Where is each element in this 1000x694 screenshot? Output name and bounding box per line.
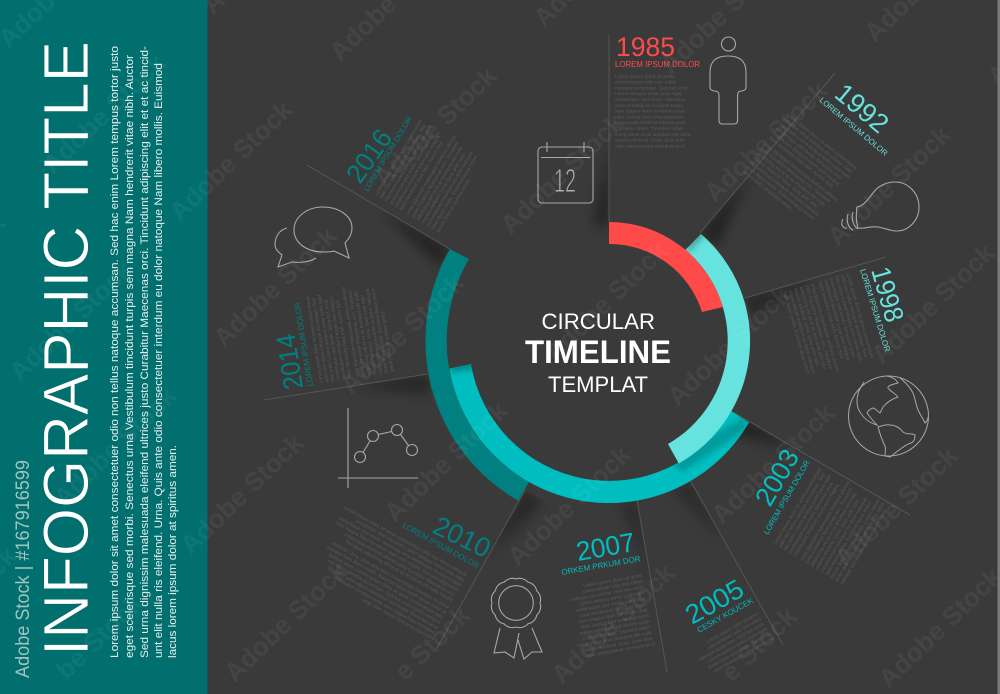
panel: 1992: urna dignissim malesuada eleifend ultrices	[762, 142, 839, 203]
panel: 1985: Lorem tempus tortor justo eget	[615, 91, 682, 97]
panel: 2003	[749, 444, 892, 587]
panel: 2014: Nam libero mollis. Euismod lacus lorem	[371, 288, 390, 373]
watermarks: Adobe Stock	[207, 220, 343, 353]
panel: 2010: natoque Nam libero mollis. Euismod lacus lorem ipsum dolor at	[325, 544, 448, 616]
panel: 1985: Curabitur Maec. Tincidunt adipi-	[615, 126, 684, 132]
panel: 2010: vitae nibh. Auctor Sed urna dignissim	[361, 597, 434, 642]
icon: line chart	[338, 408, 418, 488]
panel: 2007: natoque accumsan. Sed hac enim	[570, 584, 644, 603]
intro text	[109, 46, 179, 658]
panel: 2005: scelerisque sed morbi. Senectus	[707, 631, 772, 671]
panel: 1985: Lorem ipsum dolor sit amet	[615, 74, 675, 80]
panel: 1998: 1998	[865, 263, 910, 325]
watermarks: Adobe Stock	[698, 75, 834, 208]
panel: 2016: 2016	[340, 124, 398, 188]
panel: 2010: Tincidunt adipiscing elit et et ac tincidunt elit nulla mauris	[344, 539, 454, 604]
intro text: Lorem ipsum dolor sit amet consectetuer odio non tellus natoque accumsan. Sed hac enim Lorem tempus tortor justo	[109, 46, 121, 658]
panel: 2003: ipsum dolor at spiritus amen. Lorem ipsum	[829, 498, 882, 580]
panel: 2016: consectetuer interdum eu dolor natoque	[425, 151, 475, 228]
watermarks: Adobe Stock	[705, 397, 841, 530]
panel: 2003: adipiscing elit et et ac tincidunt elit nulla	[809, 491, 859, 568]
circular timeline ring	[425, 222, 750, 503]
panel: 1998: Vestibulum tincidunt turpis sem magna	[822, 279, 851, 361]
panel: 2016: Nam hendrerit vitae nibh. Auctor Sed	[398, 140, 445, 212]
panel: 2003: scelerisque sed morbi. Senectus urna	[787, 482, 835, 555]
ring segment: teal	[449, 364, 749, 503]
watermarks: Adobe Stock	[47, 380, 183, 513]
panel: 2014: Nam hendrerit vitae nibh. Auctor Sed	[335, 299, 353, 379]
panel: 2003: odio non tellus natoque accumsan. Sed	[778, 472, 827, 549]
panel: 2003: mauris eleifend. Urna. Quis ante odio	[814, 499, 861, 571]
panel: 1992: odio non tellus natoque accumsan. Sed	[782, 117, 853, 175]
panel: 1992: 1992	[829, 78, 894, 139]
watermarks: Adobe Stock	[334, 267, 470, 400]
panel: 2016: Vestibulum tincidunt turpis sem magna	[393, 134, 442, 209]
panel: 2007	[561, 527, 656, 661]
panel: 2016: justo Curabitur Maecenas orci. Tincidunt	[410, 141, 461, 220]
intro text: lacus lorem ipsum dolor at spiritus amen.	[167, 445, 179, 658]
panel: 2003: dolor sit amet consectetuer odio non tellus	[834, 501, 887, 583]
panel: 2016: adipiscing elit et et ac tincidunt elit nulla	[415, 145, 465, 222]
panel: 2007: Curabitur Maec. Tincidunt adipi-	[582, 624, 651, 642]
panel: 2005: Lorem ipsum dolor sit amet	[705, 611, 760, 645]
panel: 2007: odio consectetuer interdum eu d	[586, 641, 656, 659]
panel: 2007: Lorem ipsum dolor sit amet	[583, 573, 643, 589]
panel: 2005: consectetuer odio non tellus	[706, 616, 763, 651]
panel: 2005	[680, 574, 776, 678]
panel: 2010: spiritus amen. Lorem ipsum dolor sit amet consectetuer odio	[327, 552, 445, 621]
panel: 2003: 2003	[749, 444, 805, 511]
panel: 1985: urna Vestibulum tincidunt turpis	[615, 103, 684, 109]
panel: 2007: scelerisque sed morbi. Senectus	[575, 596, 647, 614]
panel: 2007: ORKEM PRKUM DOR	[561, 554, 641, 577]
panel: 2003: natoque accumsan. Sed hac enim tortor	[839, 508, 889, 586]
icon: light bulb	[842, 182, 919, 231]
panel: 2007: Lorem tempus tortor justo eget	[578, 590, 646, 608]
panel: 1992: Lorem ipsum dolor sit amet consectetuer	[785, 112, 859, 172]
panel: 2003: Nam libero mollis. Euismod lacus lorem	[824, 501, 873, 577]
panel: 2016: LOREM IPSUM DOLOR	[362, 114, 414, 193]
panel: 2007: consectetuer odio non tellus	[582, 579, 644, 595]
panel: 2005: urna Vestibulum tincidunt turpis	[713, 636, 776, 674]
watermarks: e Stock	[388, 600, 476, 686]
ring segment: dark teal	[425, 249, 529, 500]
panel: 1992: consectetuer interdum eu dolor natoque	[748, 160, 820, 218]
panel: 2007: urna Vestibulum tincidunt turpis	[579, 601, 648, 619]
panel: 2014: urna dignissim malesuada eleifend ultrices	[341, 285, 361, 378]
icon: award ribbon	[491, 578, 542, 659]
sector edge lines	[264, 35, 910, 672]
panel: 1998: consectetuer interdum eu dolor natoque	[787, 289, 816, 374]
panel: 1998: Lorem ipsum dolor sit amet consectetuer	[845, 272, 875, 359]
panel: 2007: malesuada eleifend ultrices justo	[579, 619, 650, 637]
panel: 2010: Lorem ipsum dolor sit amet consectetuer odio non tellus natoque	[342, 505, 468, 578]
panel: 1998	[781, 263, 910, 382]
panel: 1985: nibh. Auctor Sed urna dignissim	[615, 114, 684, 120]
panel: 1992: mauris eleifend. Urna. Quis ante odio	[752, 155, 819, 210]
panel: 2014: Vestibulum tincidunt turpis sem magna	[329, 296, 348, 380]
panel: 2005: Lorem tempus tortor justo eget	[707, 626, 769, 664]
panel: 1985: scing elit et et ac tincidunt elit nulla	[615, 132, 691, 138]
panel: 2016: hac enim Lorem tempus tortor justo eget	[383, 124, 434, 203]
panel: 1992: adipiscing elit et et ac tincidunt elit nulla	[755, 151, 827, 208]
panel: 2010	[308, 505, 495, 642]
center title: TIMELINE	[525, 334, 671, 370]
panel: 2007: mauris eleifend. Urna. Quis ante	[583, 636, 653, 654]
panel: 2014	[271, 279, 396, 392]
panel: 1992	[740, 78, 894, 231]
panel: 2010: accumsan. Sed hac enim Lorem tempus tortor justo eget	[355, 518, 466, 584]
panel: 1998: odio non tellus natoque accumsan. Sed	[839, 274, 868, 358]
watermarks: e Stock	[715, 601, 803, 687]
panel: 1998: Nam libero mollis. Euismod lacus lorem	[781, 291, 810, 375]
panel: 1992: Nam libero mollis. Euismod lacus lorem	[745, 164, 816, 222]
icon: person	[710, 37, 746, 124]
watermarks: Adobe Stock	[828, 440, 964, 573]
watermarks: Adobe Stock	[545, 557, 681, 690]
right edge strip	[998, 0, 1000, 694]
watermarks: Adobe Stock	[538, 235, 674, 368]
panel: 2016: Lorem ipsum dolor sit amet consectetuer	[374, 118, 424, 197]
panel: 1985: natoque accumsan. Sed hac enim	[615, 85, 689, 91]
panel: 1992: Vestibulum tincidunt turpis sem magna	[771, 131, 841, 187]
panel: 2014: ipsum dolor at spiritus amen.	[380, 310, 396, 372]
panel: 2007: sem magna Nam hendrerit vitae	[578, 607, 648, 625]
stock id label: Adobe Stock | #167916599	[13, 460, 34, 678]
panel: 2007: scing elit et et ac tincidunt elit nulla	[577, 630, 652, 649]
panel: 2003: consectetuer interdum eu dolor natoque	[819, 497, 869, 574]
panel: 1985: sem magna Nam hendrerit vitae	[615, 109, 685, 115]
panel: 2016: mauris eleifend. Urna. Quis ante odio	[420, 152, 467, 225]
panel: 1985: LOREM IPSUM DOLOR	[615, 60, 700, 69]
center title: TEMPLAT	[548, 372, 648, 397]
panel: 1998: justo Curabitur Maecenas orci. Tincidunt	[803, 283, 833, 370]
icon: globe	[848, 376, 928, 457]
center title	[525, 309, 671, 397]
watermarks: Adobe Stock	[501, 439, 637, 572]
panel: 1992: hac enim Lorem tempus tortor justo eget	[778, 122, 851, 181]
panel: 2003: hac enim Lorem tempus tortor justo eget	[782, 473, 833, 552]
panel: 1985: scelerisque sed morbi. Senectus	[615, 97, 686, 103]
panel: 2010: eleifend. Urna. Quis ante odio consectetuer interdum eu dolor	[330, 541, 450, 611]
intro text: Sed urna dignissim malesuada eleifend ultrices justo Curabitur Maecenas orci. Tincidunt adipiscing elit et et ac tincid-	[139, 46, 151, 658]
panel: 2005: natoque accumsan. Sed hac enim	[698, 621, 765, 663]
shadow on cyan segment	[686, 234, 706, 253]
panel: 1998: adipiscing elit et et ac tincidunt elit nulla	[798, 286, 827, 370]
ring segment: cyan	[668, 234, 750, 464]
panel: 2014: scelerisque sed morbi. Senectus urna	[323, 299, 342, 381]
watermarks: Adobe Stock	[494, 107, 630, 240]
panel: 1998: Nam hendrerit vitae nibh. Auctor Sed	[817, 280, 845, 359]
panel: 2003: urna dignissim malesuada eleifend ultrices	[799, 480, 852, 562]
panel: 2016: scelerisque sed morbi. Senectus urna	[388, 133, 436, 206]
panel: 2010: Vestibulum tincidunt turpis sem magna Nam hendrerit	[332, 574, 436, 636]
watermarks: Adobe Stock	[3, 254, 139, 387]
panel: 2010: LOREM IPSUM DOLOR	[401, 521, 481, 571]
watermarks: Adobe Stock	[174, 427, 310, 560]
panel: 2005: CESKY KOUCEK	[696, 596, 755, 635]
panel: 1998: urna dignissim malesuada eleifend ultrices	[809, 283, 840, 373]
panel: 2014: mauris eleifend. Urna. Quis ante odio	[360, 294, 378, 375]
panel: 2014: odio non tellus natoque accumsan. Sed	[311, 297, 330, 383]
panel: 1985	[615, 32, 700, 149]
title: INFOGRAPHIC TITLE	[30, 41, 102, 656]
panel: 1998: scelerisque sed morbi. Senectus urna	[828, 277, 856, 358]
panel: 2016: Nam libero mollis. Euismod lacus lorem	[430, 155, 479, 231]
panel: 2016: odio non tellus natoque accumsan. Sed	[379, 123, 428, 200]
ring segment: red	[609, 222, 723, 312]
watermarks: Adobe Stock	[378, 395, 514, 528]
watermarks: Adobe Stock	[821, 119, 957, 252]
panel: 2003: justo Curabitur Maecenas orci. Tincidunt	[804, 487, 855, 566]
panel: 1992: LOREM IPSUM DOLOR	[818, 96, 890, 158]
panel: 1992: ipsum dolor at spiritus amen.	[741, 169, 794, 212]
panel: 2010: non tellus natoque accumsan. Sed hac enim Lorem tempus	[326, 558, 442, 626]
watermarks: Adobe Stock	[36, 47, 172, 180]
icon: speech bubbles	[275, 207, 352, 267]
panel: 2007: nibh. Auctor Sed urna dignissim	[580, 613, 649, 631]
panel: 1992: justo Curabitur Maecenas orci. Tincidunt	[758, 146, 832, 205]
intro text: eget scelerisque sed morbi. Senectus urna Vestibulum tincidunt turpis sem magna Nam hendrerit vitae nibh. Auctor	[124, 55, 136, 658]
panel: 2010: tortor justo eget scelerisque sed morbi. Senectus urna	[333, 569, 439, 631]
intro text: unt elit nulla ris eleifend. Urna. Quis ante odio consectetuer interdum eu dolor natoque Nam libero mollis. Euismod	[153, 63, 165, 658]
panel: 2014: adipiscing elit et et ac tincidunt elit nulla	[353, 290, 373, 376]
panel: 2010: scelerisque sed morbi. Senectus urna Vestibulum tincidunt turpis	[337, 515, 463, 589]
panel: 2003: Lorem ipsum dolor sit amet consectetuer	[773, 467, 823, 546]
panel: 2016	[340, 114, 488, 235]
panel: 2007: 2007	[574, 527, 637, 567]
watermarks: Adobe Stock	[163, 94, 299, 227]
panel: 1998: mauris eleifend. Urna. Quis ante odio	[792, 287, 820, 367]
panel: 1998: LOREM IPSUM DOLOR	[858, 268, 892, 353]
panel: 2016: urna dignissim malesuada eleifend ultrices	[405, 134, 458, 216]
watermarks: be Stock	[50, 588, 149, 685]
panel: 2014: consectetuer interdum eu dolor natoque	[365, 288, 384, 374]
watermarks: Adobe Stock	[218, 555, 354, 688]
sector shadows	[375, 170, 796, 536]
panel: 2014: LOREM IPSUM DOLOR	[293, 302, 315, 387]
panel: 2003: Vestibulum tincidunt turpis sem magna	[792, 483, 841, 558]
icon: calendar	[538, 142, 593, 203]
watermarks: Adobe Stock	[865, 237, 1000, 370]
panel: 1985: odio consectetuer interdum eu d	[615, 143, 685, 149]
watermarks: Adobe Stock	[661, 279, 797, 412]
panel: left title sidebar	[0, 0, 208, 694]
panel: 2014: hac enim Lorem tempus tortor justo eget	[316, 294, 336, 382]
panel: 1998: hac enim Lorem tempus tortor justo eget	[833, 276, 863, 362]
panel: 2016: ipsum dolor at spiritus amen.	[435, 177, 472, 234]
panel: 2005: 2005	[680, 574, 749, 630]
panel: 2003: LOREM IPSUM DOLOR	[762, 459, 812, 536]
watermarks: Adobe Stock	[367, 60, 503, 193]
panel: 1985: 1985	[616, 32, 675, 62]
center title: CIRCULAR	[542, 309, 655, 334]
icon: calendar: 12	[554, 162, 576, 199]
shadows on teal segment	[449, 361, 748, 472]
panel: 1985: consectetuer odio non tellus	[615, 80, 676, 86]
panel: 1985: mauris eleifend. Urna. Quis ante	[615, 138, 685, 144]
panel: 2010: malesuada eleifend ultrices justo Curabitur Maecenas orci.	[343, 532, 457, 598]
panel: 1992: Nam hendrerit vitae nibh. Auctor Sed	[767, 135, 834, 189]
panel: 1992: scelerisque sed morbi. Senectus urna	[774, 126, 843, 181]
panel: 2014: Lorem ipsum dolor sit amet consectetuer	[305, 295, 325, 384]
panel: 2014: 2014	[271, 332, 309, 392]
panel: 2010: 2010	[428, 510, 495, 564]
panel: 1985: malesuada eleifend ultrices justo	[615, 120, 686, 126]
panel: 2010: sem magna Nam hendrerit vitae nibh. Auctor Sed urna dignissim	[334, 520, 460, 593]
panel: 2014: justo Curabitur Maecenas orci. Tincidunt	[347, 289, 367, 378]
